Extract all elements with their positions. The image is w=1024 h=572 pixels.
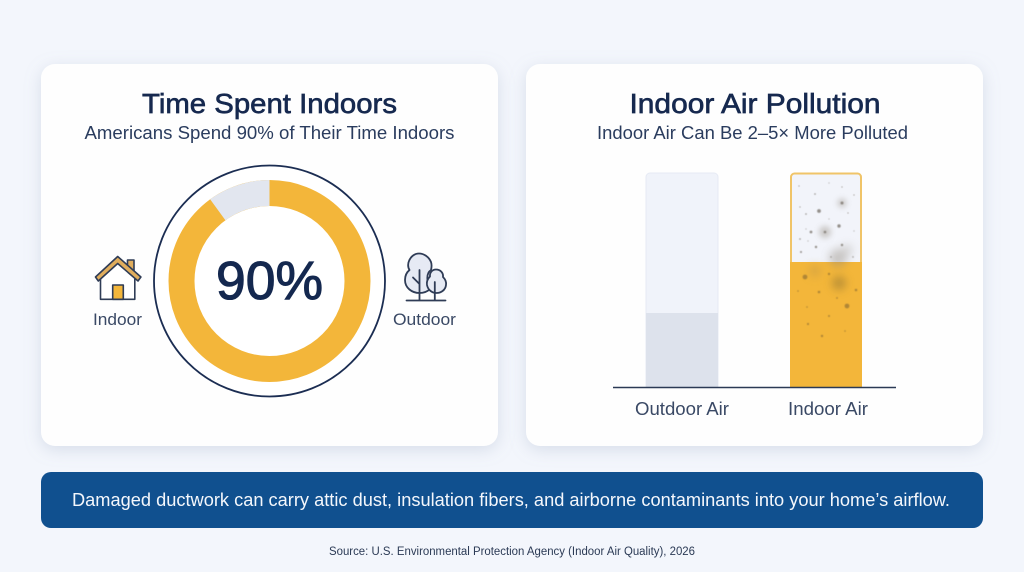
subheading: 2-5x more polluted: Indoor Air Can Be 2–5× More Polluted <box>597 123 908 143</box>
bar: indoor air <box>790 174 862 387</box>
icon: house <box>96 256 141 299</box>
heading: indoor air pollution: Indoor Air Pollution <box>630 88 880 119</box>
label: outdoor air: Outdoor Air <box>635 399 729 419</box>
particles: small dust specks <box>798 182 855 258</box>
source note: Source: U.S. Environmental Protection Agency (Indoor Air Quality), 2026 <box>329 546 695 558</box>
label: indoor: Indoor <box>93 310 142 329</box>
subheading: americans: Americans Spend 90% of Their Time Indoors <box>84 123 454 143</box>
particles: blurred dust clouds <box>809 198 853 290</box>
panel: time spent indoors <box>41 64 498 446</box>
panel: indoor air pollution <box>526 64 983 446</box>
axis baseline <box>613 386 896 388</box>
bar: outdoor air <box>646 173 718 387</box>
callout banner <box>41 472 983 528</box>
heading: time spent indoors: Time Spent Indoors <box>142 88 397 119</box>
label: indoor air: Indoor Air <box>788 399 868 419</box>
donut chart: 90 percent <box>154 166 385 396</box>
donut chart: 90 percent: 90% <box>216 251 323 311</box>
particles: specks on amber fill <box>797 273 857 337</box>
icon: trees <box>405 254 446 300</box>
label: outdoor: Outdoor <box>393 310 456 329</box>
callout banner: Damaged ductwork can carry attic dust, insulation fibers, and airborne contaminants into your home’s airflow. <box>72 490 950 510</box>
